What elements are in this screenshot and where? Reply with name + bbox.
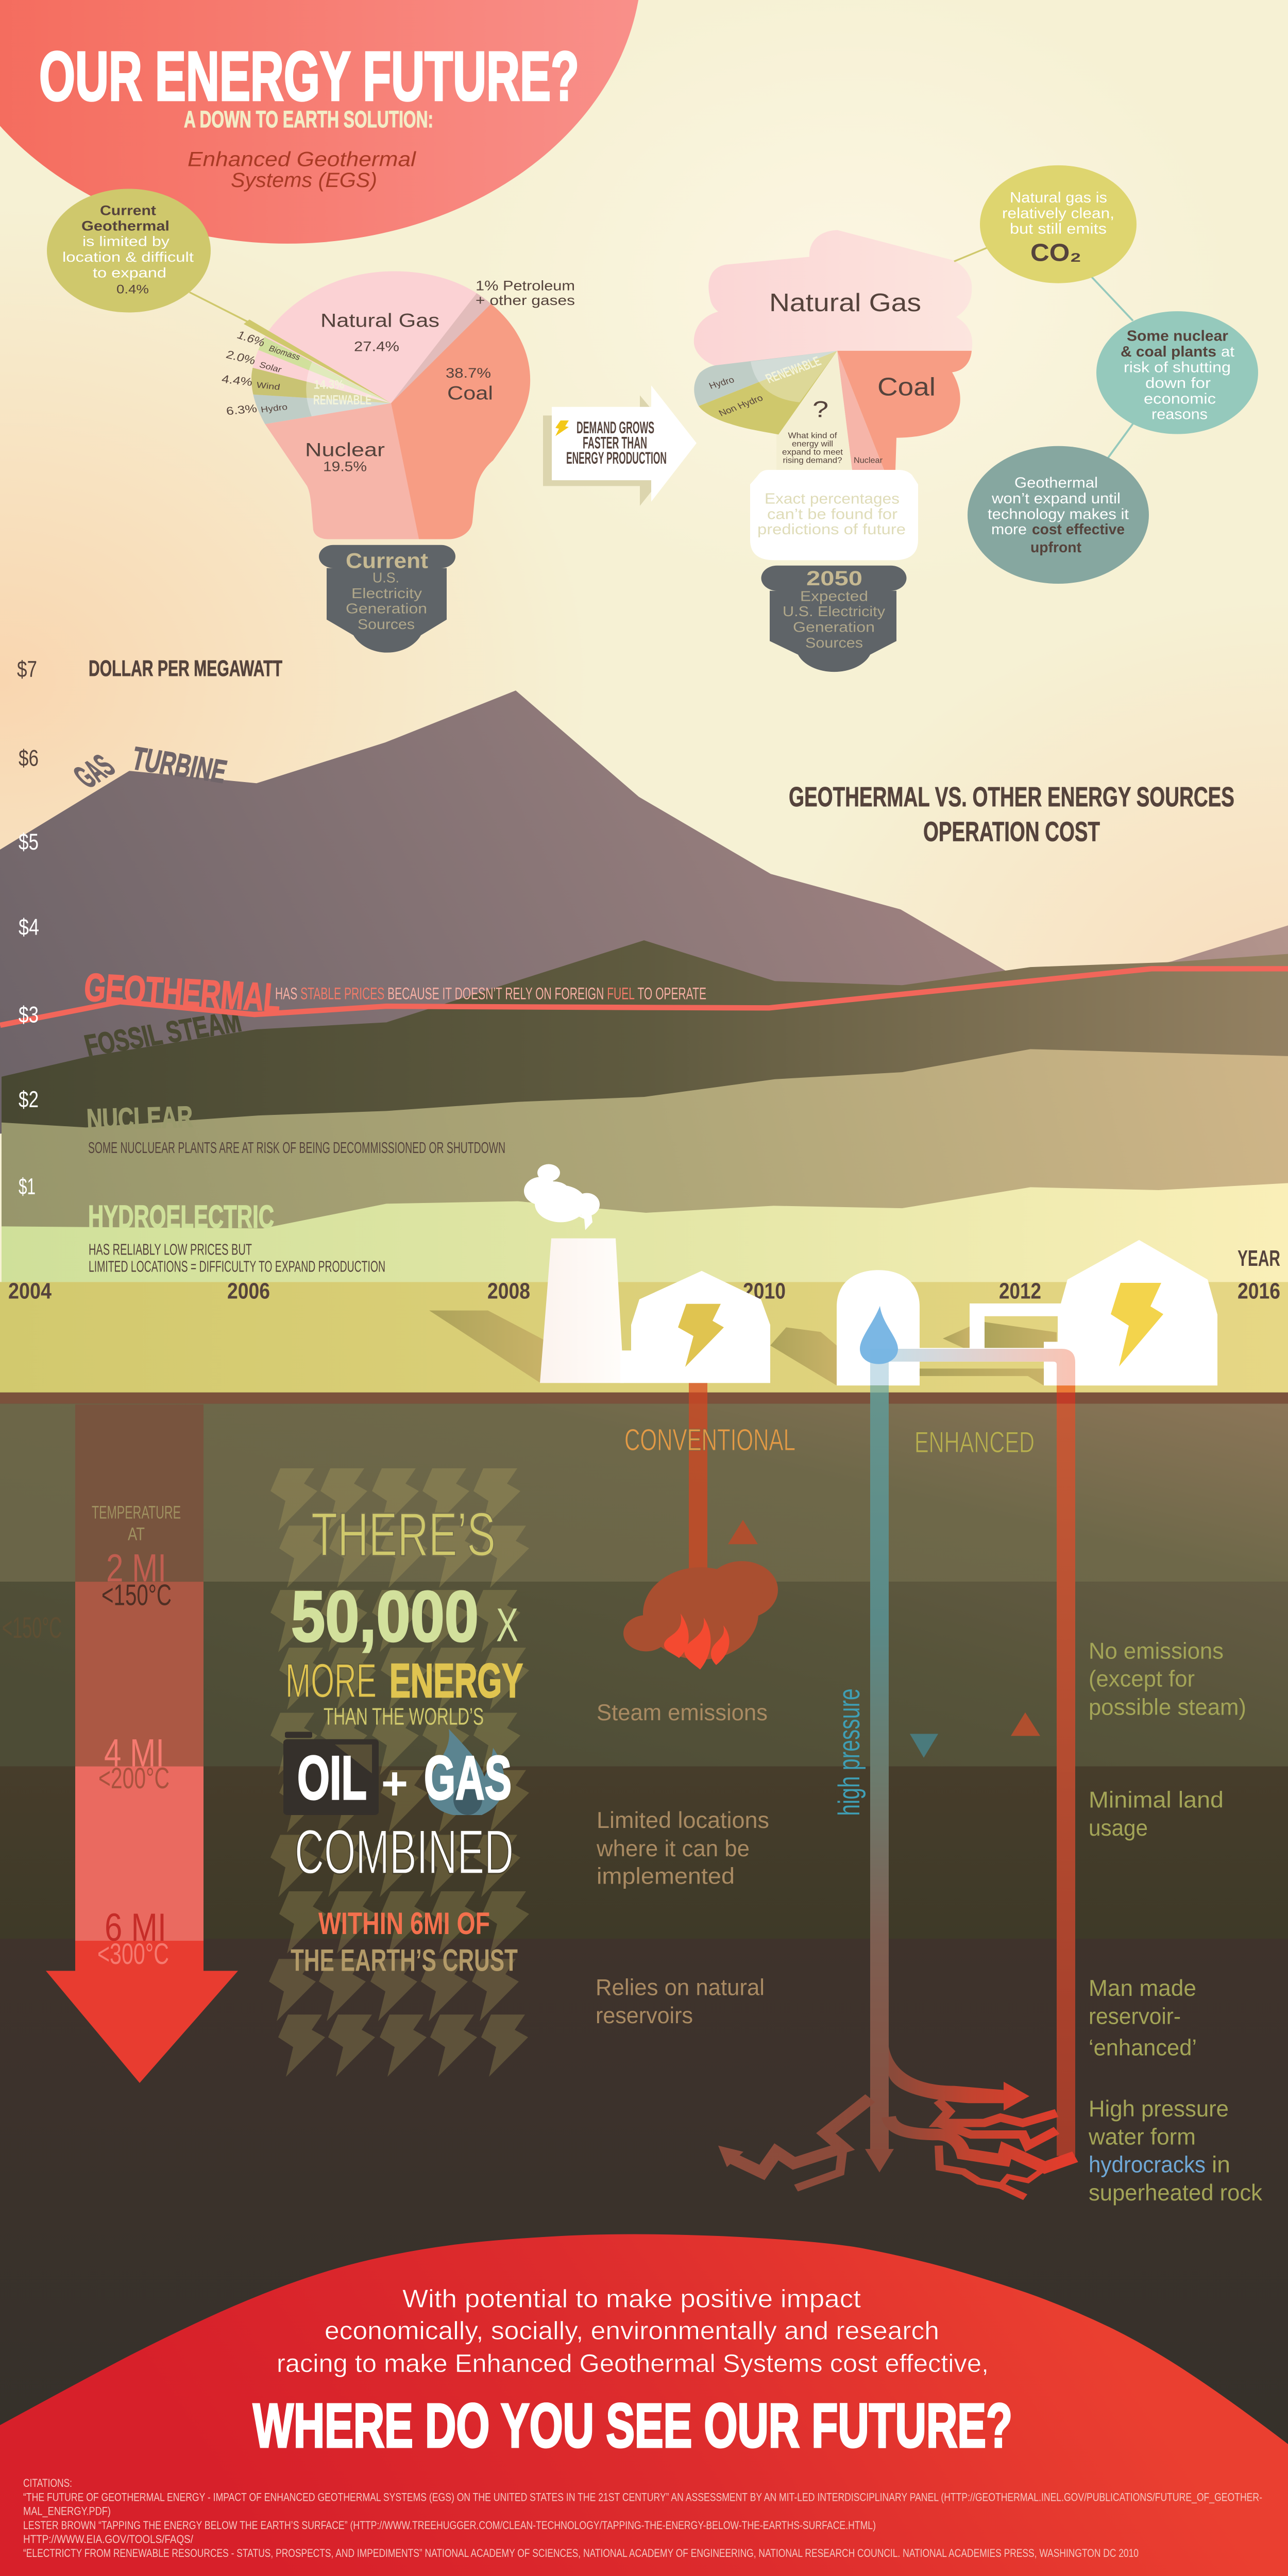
renewable label: 14.3%	[314, 377, 344, 392]
year axis: 2012	[999, 1279, 1041, 1303]
area: gas turbine	[0, 690, 1288, 1133]
natural gas cap	[694, 230, 972, 366]
arrow: demand grows: FASTER THAN	[583, 433, 647, 452]
bulb base: current: U.S.	[372, 569, 399, 586]
year axis: 2010	[743, 1279, 786, 1303]
pipe: surface connection	[870, 1349, 1075, 1385]
closing statement: economically, socially, environmentally and research	[325, 2316, 939, 2345]
temperature labels: 4 MI	[104, 1732, 164, 1775]
closing statement	[277, 2284, 989, 2378]
slice labels: 6.3%	[225, 402, 258, 418]
enhanced notes: (except for	[1089, 1666, 1195, 1691]
enhanced notes: High pressure	[1089, 2095, 1229, 2122]
conventional notes: reservoirs	[596, 2002, 693, 2028]
y axis labels	[17, 656, 39, 1199]
statement: 50,000x more energy: THAN THE WORLD’S	[324, 1703, 484, 1730]
label: gas turbine: TURBINE	[129, 740, 230, 790]
unknown slice	[776, 351, 852, 470]
y axis labels: $2	[19, 1087, 39, 1112]
line: geothermal	[0, 969, 1288, 1025]
labels: What kind of	[788, 431, 837, 440]
chart: operation cost	[0, 656, 1288, 1282]
callout: nuclear and coal: Some nuclear	[1127, 327, 1228, 344]
citations: HTTP://WWW.EIA.GOV/TOOLS/FAQS/	[23, 2533, 194, 2546]
labels: Hydro	[707, 375, 736, 391]
statement: 50,000x more energy: X	[496, 1599, 518, 1652]
bulb base: 2050: Sources	[805, 634, 863, 651]
label: gas turbine	[65, 740, 230, 794]
pipe: hot return	[1057, 1403, 1075, 2156]
statement: 50,000x more energy: OIL	[297, 1743, 367, 1812]
labels: Natural Gas	[769, 288, 921, 317]
statement: 50,000x more energy: MORE	[285, 1654, 377, 1707]
conventional notes: Steam emissions	[597, 1699, 768, 1725]
icon: power house large	[1058, 1240, 1217, 1385]
temperature depth arrow	[2, 1404, 238, 2083]
callout: geothermal cost: upfront	[1030, 539, 1081, 555]
conventional notes: Limited locations	[597, 1807, 769, 1833]
arrow: main fracture	[889, 2047, 1029, 2111]
icon: power house	[620, 1271, 770, 1383]
subtitle: EGS: Systems (EGS)	[231, 168, 377, 192]
conventional notes: Relies on natural	[596, 1974, 765, 2000]
temperature labels: 6 MI	[105, 1906, 166, 1950]
arrow: well tip	[865, 2149, 894, 2173]
callout: current geothermal: location & difficult	[62, 250, 194, 265]
renewable label: RENEWABLE	[763, 354, 824, 386]
icon: cooling tower	[540, 1239, 624, 1383]
year axis: 2008	[487, 1279, 530, 1303]
slice labels: 27.4%	[354, 338, 399, 354]
labels: ?	[812, 396, 828, 422]
footer dome	[0, 2234, 1288, 2576]
arrow: demand grows: ENERGY PRODUCTION	[566, 449, 667, 467]
bulb base: current: Generation	[346, 600, 427, 617]
panel: current generation bulb	[189, 271, 574, 539]
slice labels: 19.5%	[323, 459, 367, 474]
note: nuclear: SOME NUCLUEAR PLANTS ARE AT RISK OF BEING DECOMMISSIONED OR SHUTDOWN	[88, 1139, 505, 1157]
label: fossil steam: FOSSIL STEAM	[81, 1005, 245, 1062]
statement: 50,000x more energy: +	[381, 1758, 408, 1809]
callout: geothermal cost	[968, 446, 1149, 584]
bulb base: current: Electricity	[351, 585, 422, 601]
conventional notes: implemented	[597, 1863, 735, 1889]
building shadows	[429, 1311, 1057, 1385]
renewable overlay	[306, 362, 391, 416]
temperature labels: <150°C	[101, 1579, 172, 1612]
temperature labels: <200°C	[98, 1761, 170, 1794]
callout: geothermal cost: more	[991, 520, 1027, 537]
slice labels: Solar	[258, 360, 283, 375]
y axis labels: $5	[19, 828, 39, 855]
connector frame	[920, 1303, 1061, 1385]
panel: 2050 bulb	[694, 230, 972, 672]
header sun circle	[0, 0, 642, 244]
slice labels: Hydro	[260, 402, 288, 414]
labels: Nuclear	[854, 455, 883, 465]
renewable label: RENEWABLE	[313, 393, 371, 408]
pipe: conventional	[689, 1383, 707, 1570]
slice labels: Wind	[256, 380, 281, 392]
heading: enhanced: ENHANCED	[914, 1426, 1035, 1459]
arrow: demand grows	[543, 385, 697, 506]
y axis labels: $7	[17, 656, 37, 682]
y axis labels: $6	[19, 745, 39, 771]
citations	[23, 2477, 1262, 2560]
slice labels: Nuclear	[305, 439, 385, 461]
coal	[837, 351, 972, 470]
statement: 50,000x more energy: THE EARTH’S CRUST	[291, 1943, 518, 1978]
labels: Non Hydro	[717, 393, 765, 418]
ground	[0, 1282, 1288, 1393]
enhanced notes: reservoir-	[1089, 2003, 1181, 2029]
enhanced notes: in	[1212, 2151, 1230, 2177]
temperature labels: AT	[128, 1524, 145, 1544]
arrow: fracture tip	[718, 2146, 743, 2167]
bulb base: 2050: Generation	[793, 619, 875, 635]
temperature labels: TEMPERATURE	[92, 1503, 181, 1523]
arrow: steam rising	[728, 1520, 758, 1544]
closing statement: racing to make Enhanced Geothermal Systems cost effective,	[277, 2349, 989, 2378]
temperature labels: <300°C	[97, 1937, 169, 1970]
enhanced notes: Minimal land	[1089, 1787, 1224, 1812]
note: hydroelectric	[89, 1241, 385, 1275]
title: OUR ENERGY FUTURE?	[39, 38, 579, 115]
callout: current geothermal: 0.4%	[116, 282, 149, 296]
callout: natural gas: but still emits	[1010, 220, 1107, 237]
subtitle: EGS	[188, 147, 417, 192]
enhanced notes: ‘enhanced’	[1089, 2035, 1197, 2060]
bulb base: 2050	[761, 566, 906, 672]
enhanced notes: Man made	[1089, 1975, 1196, 2001]
enhanced plant	[718, 1240, 1217, 2197]
y axis labels: $3	[19, 1002, 39, 1027]
callout: nuclear and coal: economic	[1144, 390, 1216, 407]
icon: water drop	[860, 1306, 898, 1364]
label: high pressure: high pressure	[833, 1688, 866, 1816]
label: geothermal: GEOTHERMAL	[82, 965, 282, 1020]
icon: flames	[664, 1614, 730, 1670]
leader lines between callouts	[954, 248, 1133, 457]
callout: geothermal cost: Geothermal	[1014, 474, 1098, 491]
chart heading: OPERATION COST	[923, 816, 1100, 847]
underground layers	[0, 1393, 1288, 2576]
y axis labels: $4	[19, 914, 39, 940]
label: hydroelectric: HYDROELECTRIC	[88, 1198, 274, 1234]
slice labels: Coal	[447, 382, 493, 403]
arrow: down	[910, 1734, 938, 1758]
icon: gas flame	[428, 1729, 504, 1815]
statement: 50,000x more energy: 50,000	[291, 1577, 479, 1656]
geothermal wedge and leader	[190, 292, 391, 403]
slice labels	[221, 278, 575, 474]
labels: Coal	[877, 372, 936, 401]
white socket note: can’t be found for	[767, 505, 897, 522]
heading: conventional: CONVENTIONAL	[624, 1423, 795, 1457]
label: nuclear: NUCLEAR	[86, 1100, 193, 1136]
pie slices in bulb	[251, 271, 531, 539]
hydrocracks	[718, 2047, 1075, 2197]
y axis labels: $1	[19, 1173, 36, 1199]
closing statement: With potential to make positive impact	[402, 2284, 861, 2313]
labels: rising demand?	[783, 455, 842, 465]
callout: current geothermal: Geothermal	[81, 218, 170, 233]
slice labels: 4.4%	[221, 373, 253, 388]
renewable overlay	[751, 351, 837, 402]
slice labels: Biomass	[267, 344, 302, 362]
icon: lightning bolt	[678, 1304, 724, 1367]
subtitle: A DOWN TO EARTH SOLUTION:	[184, 106, 433, 132]
labels	[707, 288, 936, 465]
enhanced notes: hydrocracks	[1089, 2151, 1206, 2177]
note: hydroelectric: LIMITED LOCATIONS = DIFFICULTY TO EXPAND PRODUCTION	[89, 1258, 385, 1275]
nuclear slice	[837, 351, 884, 470]
white socket note: Exact percentages	[765, 490, 900, 507]
white socket note	[750, 470, 918, 560]
statement: 50,000x more energy	[283, 1500, 523, 1978]
callout: geothermal cost: technology makes it	[988, 505, 1129, 522]
area: nuclear	[2, 1049, 1288, 1236]
sky background	[0, 0, 1288, 1286]
callout: nuclear and coal: at	[1221, 343, 1234, 360]
note: hydroelectric: HAS RELIABLY LOW PRICES BUT	[89, 1241, 252, 1259]
statement: 50,000x more energy: COMBINED	[295, 1817, 514, 1887]
area: hydroelectric	[2, 1183, 1288, 1282]
conventional notes: where it can be	[596, 1835, 750, 1861]
subtitle: EGS: Enhanced Geothermal	[188, 147, 417, 171]
bulb base: current: Current	[346, 549, 428, 572]
non hydro	[699, 351, 837, 434]
pipe: water injection	[870, 1385, 889, 2152]
callout: natural gas: Natural gas is	[1010, 189, 1107, 206]
enhanced notes: water form	[1088, 2124, 1196, 2149]
conventional notes	[596, 1699, 769, 2028]
callout: geothermal cost: cost effective	[1032, 520, 1125, 537]
callout: natural gas	[980, 165, 1137, 283]
icon: lightning	[555, 420, 569, 436]
note: geothermal: HAS STABLE PRICES BECAUSE IT DOESN’T RELY ON FOREIGN FUEL TO OPERATE	[275, 984, 706, 1003]
year axis	[8, 1246, 1280, 1303]
bulb base: 2050: 2050	[806, 567, 862, 590]
label: gas turbine: GAS	[65, 748, 123, 794]
enhanced notes: No emissions	[1089, 1638, 1224, 1664]
conventional plant	[524, 1164, 795, 1670]
bulb base: 2050: U.S. Electricity	[783, 603, 885, 619]
axis title: DOLLAR PER MEGAWATT	[89, 656, 282, 681]
statement: 50,000x more energy: WITHIN 6MI OF	[318, 1907, 490, 1941]
year axis: 2004	[8, 1279, 52, 1303]
callout: nuclear and coal: risk of shutting	[1124, 359, 1231, 376]
lightning bolt pattern	[269, 1468, 529, 2077]
callout: natural gas: relatively clean,	[1002, 205, 1114, 221]
icon: oil can	[283, 1732, 379, 1815]
callout: natural gas: CO₂	[1030, 239, 1081, 266]
callout: nuclear and coal: & coal plants	[1121, 343, 1216, 360]
callout: nuclear and coal: down for	[1145, 374, 1211, 391]
statement: 50,000x more energy: THERE’S	[311, 1500, 496, 1569]
slice labels: 1% Petroleum	[476, 278, 575, 293]
temperature labels: <150°C	[2, 1611, 62, 1644]
temperature labels	[2, 1503, 181, 1970]
statement: 50,000x more energy: GAS	[424, 1743, 512, 1812]
icon: lightning bolt	[1111, 1283, 1163, 1366]
bulb base: 2050: Expected	[800, 588, 868, 604]
callout: current geothermal: to expand	[93, 266, 166, 281]
bulb base: current: Sources	[358, 616, 415, 632]
slice labels: 38.7%	[446, 365, 491, 381]
icon: well dome	[837, 1270, 920, 1385]
labels: energy will	[792, 439, 833, 448]
citations: CITATIONS:	[23, 2477, 72, 2489]
slice labels: 1.6%	[235, 329, 267, 349]
year axis: 2006	[227, 1279, 270, 1303]
citations: MAL_ENERGY.PDF)	[23, 2505, 111, 2518]
slice labels: + other gases	[476, 293, 575, 308]
callout: nuclear and coal: reasons	[1151, 405, 1208, 422]
temperature labels: 2 MI	[106, 1546, 166, 1590]
callout: geothermal cost: won’t expand until	[991, 489, 1121, 506]
enhanced notes: possible steam)	[1089, 1694, 1246, 1720]
chart heading	[789, 781, 1234, 847]
labels: expand to meet	[782, 447, 843, 456]
callout: nuclear and coal	[1096, 311, 1258, 434]
callout: current geothermal: is limited by	[82, 234, 170, 249]
callout: current geothermal	[47, 189, 211, 312]
icon: natural reservoir	[623, 1561, 778, 1659]
callout: current geothermal: Current	[100, 204, 156, 218]
white socket note: predictions of future	[757, 520, 906, 537]
slice labels: Natural Gas	[320, 310, 439, 331]
slice labels: 2.0%	[224, 348, 258, 367]
bulb base: current	[319, 545, 455, 653]
renewable label	[313, 377, 371, 408]
arrow: demand grows: DEMAND GROWS	[577, 418, 654, 437]
enhanced notes	[1088, 1638, 1263, 2206]
enhanced notes: usage	[1089, 1815, 1148, 1841]
hydro	[694, 351, 837, 406]
icon: smoke	[524, 1164, 600, 1230]
statement: 50,000x more energy: ENERGY	[389, 1654, 523, 1707]
arrow: up	[1011, 1713, 1040, 1736]
area: fossil steam	[2, 940, 1288, 1138]
